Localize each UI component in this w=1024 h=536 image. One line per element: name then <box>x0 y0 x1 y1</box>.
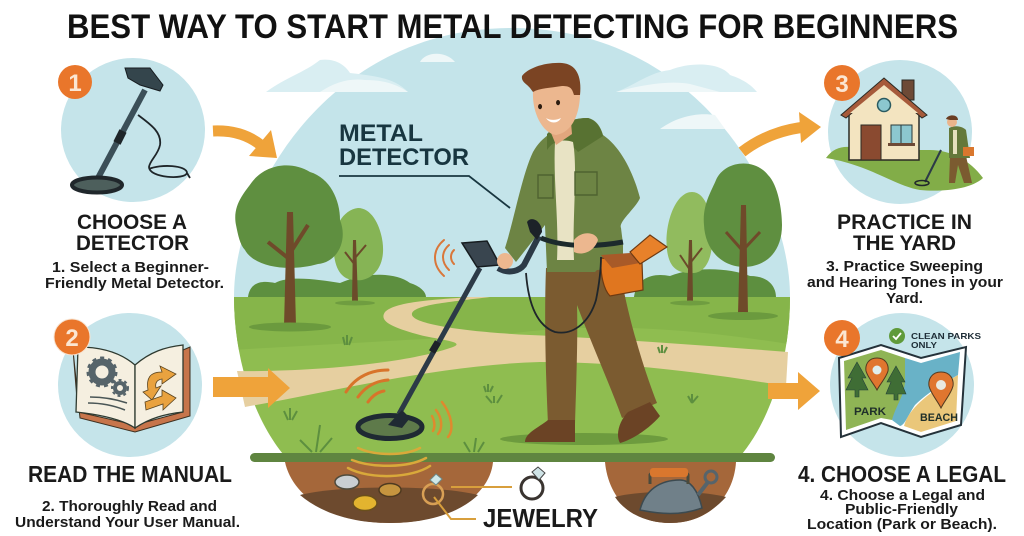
panel: step 3 practice in the yard <box>807 60 1003 307</box>
bag <box>601 258 643 296</box>
heading: READ THE MANUAL <box>28 461 232 487</box>
icon circle <box>61 58 205 202</box>
badge 4: 4 <box>835 326 849 353</box>
panel: step 4 choose a legal location <box>798 313 1006 533</box>
icon circle <box>828 60 972 204</box>
jacket <box>505 118 640 272</box>
description: 1. Select a Beginner- <box>52 259 209 276</box>
panel: step 2 read the manual <box>15 313 240 531</box>
detector <box>358 219 623 438</box>
arrow: scene to step 3 <box>742 112 821 152</box>
icon: small detectorist <box>915 115 974 186</box>
icon: detector <box>72 68 190 192</box>
label: jewelry with ring icon <box>434 467 598 533</box>
badge 3: 3 <box>835 71 849 98</box>
underground treasures <box>335 474 443 510</box>
trousers <box>545 268 657 424</box>
description: and Hearing Tones in your <box>807 274 1003 291</box>
badge 3 <box>824 65 860 101</box>
description: Friendly Metal Detector. <box>45 275 224 292</box>
bushes <box>248 269 776 297</box>
grass tufts <box>284 335 698 452</box>
head <box>533 84 580 135</box>
neck <box>549 122 572 145</box>
badge 2 <box>54 319 90 355</box>
label: metal detector: METAL <box>339 120 423 147</box>
icon: clean parks only check: CLEAN PARKS <box>911 331 981 341</box>
label: jewelry with ring icon: JEWELRY <box>483 503 598 533</box>
tree: big left <box>235 165 343 332</box>
icon: yard ground <box>826 147 983 191</box>
pockets <box>538 172 597 198</box>
icon: open manual book <box>73 345 190 432</box>
label: metal detector: DETECTOR <box>339 144 469 171</box>
icon: folded map: BEACH <box>920 412 958 424</box>
signal waves <box>346 240 454 476</box>
description <box>45 259 224 292</box>
description <box>807 487 997 533</box>
shirt <box>555 140 575 260</box>
badge 1: 1 <box>68 70 82 97</box>
description: Location (Park or Beach). <box>807 516 997 533</box>
panel: central park scene <box>230 25 795 467</box>
shoes <box>525 420 575 442</box>
arrow: scene to step 4 <box>768 372 820 410</box>
heading: CHOOSE A <box>77 211 187 234</box>
badge 1 <box>58 65 92 99</box>
tree: small right <box>667 192 712 306</box>
panel: step 1 choose a detector <box>45 58 224 292</box>
icon: house <box>841 78 927 160</box>
icon: folded map <box>839 345 966 437</box>
man with metal detector <box>358 63 668 445</box>
heading: 4. CHOOSE A LEGAL <box>798 461 1006 487</box>
icon: clean parks only check: ONLY <box>911 340 937 350</box>
heading <box>837 211 972 255</box>
description: 2. Thoroughly Read and <box>42 498 217 515</box>
description: Public-Friendly <box>845 501 959 518</box>
description: 3. Practice Sweeping <box>826 258 983 275</box>
description: 4. Choose a Legal and <box>820 487 985 504</box>
cable <box>526 257 601 333</box>
arrow: step 2 to scene <box>213 368 290 408</box>
tree: small left <box>333 208 383 306</box>
description: Yard. <box>886 290 923 307</box>
badge 4 <box>824 320 860 356</box>
hands <box>497 253 513 269</box>
heading: PRACTICE IN <box>837 211 972 234</box>
icon: folded map: PARK <box>854 406 886 418</box>
description <box>807 258 1003 307</box>
heading <box>76 211 189 255</box>
heading: THE YARD <box>853 232 956 255</box>
ground bar and underground cross-sections <box>250 453 775 523</box>
iron relic <box>640 468 717 514</box>
description: Understand Your User Manual. <box>15 514 240 531</box>
title: BEST WAY TO START METAL DETECTING FOR BEGINNERS <box>67 8 958 46</box>
icon circle <box>830 313 974 457</box>
heading: DETECTOR <box>76 232 189 255</box>
description <box>15 498 240 531</box>
face <box>538 100 560 109</box>
badge 2: 2 <box>65 325 79 352</box>
hair <box>522 63 580 95</box>
hood and lapel shading <box>547 118 603 152</box>
icon: clean parks only check <box>889 328 981 350</box>
arrow: step 1 to scene <box>213 130 277 158</box>
icon circle <box>58 313 202 457</box>
tree: big right <box>704 164 782 320</box>
label: metal detector <box>339 120 510 208</box>
winding path <box>237 297 788 407</box>
shadow under feet <box>500 433 668 445</box>
clouds <box>266 54 757 129</box>
